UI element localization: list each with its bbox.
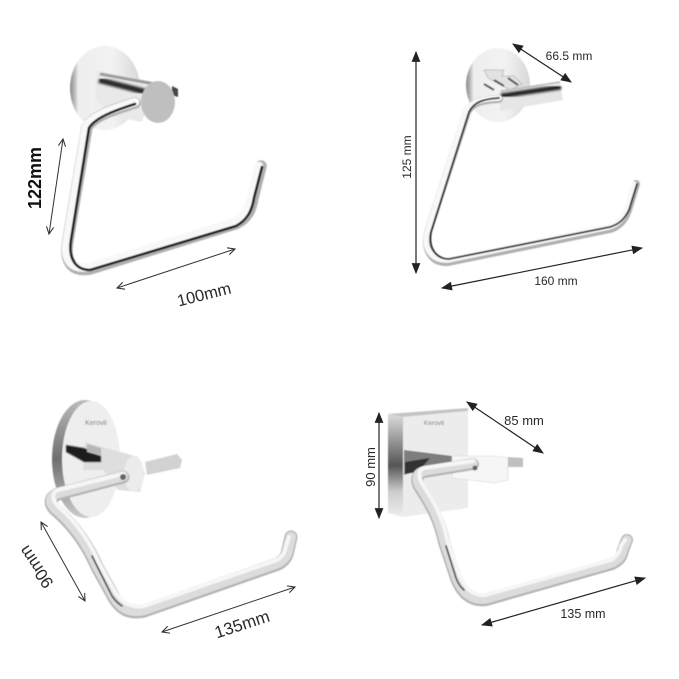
arrow: 135 mm — [482, 578, 645, 625]
arrow: 90mm — [41, 522, 85, 601]
label: 135mm: 135mm — [212, 607, 272, 642]
arrow: 160 mm — [442, 248, 642, 288]
arrow: 125 mm — [415, 52, 417, 273]
label: 135 mm: 135 mm — [560, 607, 606, 621]
arrow: 90 mm — [378, 413, 380, 518]
label: 125 mm: 125 mm — [400, 135, 414, 179]
icon: slim chrome holder two — [426, 48, 637, 262]
arrow: 85 mm — [467, 402, 543, 453]
label: 100mm: 100mm — [175, 280, 233, 310]
label: 85 mm: 85 mm — [504, 413, 544, 428]
label: 122mm: 122mm — [25, 147, 45, 209]
arrow: 100mm — [117, 249, 235, 288]
label: 90 mm: 90 mm — [363, 447, 378, 487]
arrow: 135mm — [162, 587, 295, 632]
panel: holder four, bottom right — [363, 402, 645, 625]
panel: holder one, top left — [25, 46, 262, 310]
arrow: 66.5 mm — [513, 44, 571, 82]
icon: Kerovit round holder: Kerovit — [85, 420, 107, 427]
arrow: 122mm — [49, 139, 63, 234]
icon: Kerovit square holder — [388, 408, 627, 600]
panel: holder three, bottom left — [15, 400, 295, 642]
label: 160 mm: 160 mm — [534, 274, 578, 288]
icon: Kerovit round holder — [51, 400, 291, 612]
label: 90mm: 90mm — [15, 542, 57, 592]
icon: Kerovit square holder: Kerovit — [424, 420, 444, 427]
panel: holder two, top right — [400, 44, 642, 288]
label: 66.5 mm: 66.5 mm — [546, 49, 592, 63]
icon: round chrome holder one — [66, 46, 262, 270]
